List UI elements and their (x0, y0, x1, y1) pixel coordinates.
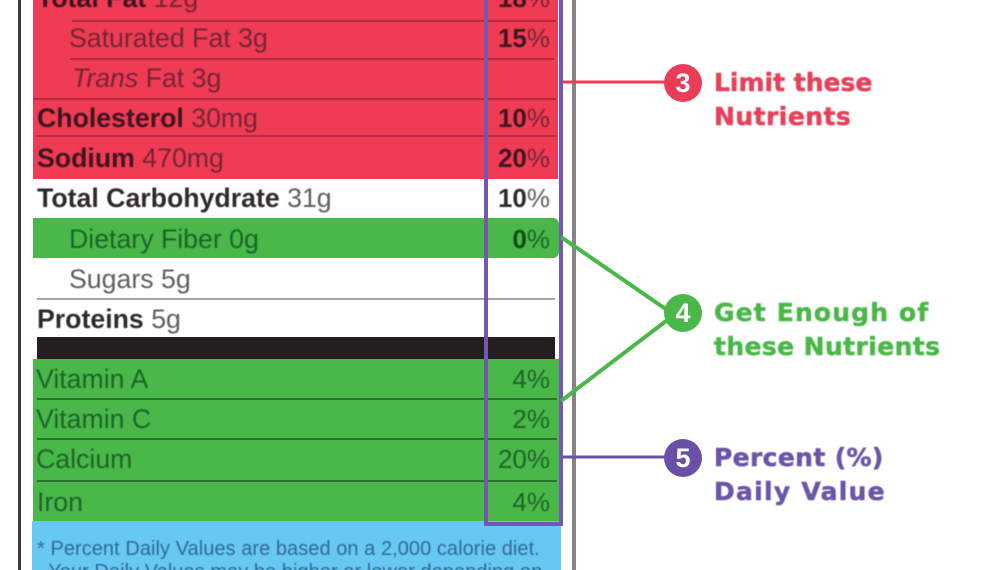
percent daily value column outline (484, 0, 563, 526)
row: sodium: Sodium 470mg (37, 143, 224, 173)
panel: fiber green row (33, 218, 559, 258)
panel: red limit nutrients block (33, 0, 558, 179)
row: saturated fat: Saturated Fat 3g (69, 23, 268, 53)
row: trans fat: Trans Fat 3g (72, 63, 221, 93)
value: cholesterol percent: 10% (498, 103, 550, 133)
row: calcium: Calcium (36, 444, 132, 474)
heading: limit these nutrients (714, 68, 872, 131)
value: carbohydrate percent: 10% (498, 183, 550, 213)
heading: percent daily value (714, 443, 886, 506)
heading: percent daily value: Percent (%) (714, 443, 884, 472)
row: iron: Iron (37, 487, 83, 517)
value: sodium percent: 20% (498, 143, 550, 173)
heading: limit these nutrients: Limit these (714, 68, 872, 97)
badge 5 (664, 439, 702, 477)
badge 5: 5 (675, 443, 691, 473)
badge 4 (664, 294, 702, 332)
panel: footnote blue block (32, 521, 561, 570)
footnote text (37, 538, 542, 570)
row: proteins: Proteins 5g (37, 304, 181, 334)
heading: get enough of these nutrients: Get Enough of (714, 298, 929, 327)
row: total carbohydrate: Total Carbohydrate 31g (37, 183, 332, 213)
row: dietary fiber: Dietary Fiber 0g (69, 224, 259, 254)
badge 4: 4 (675, 298, 691, 328)
value: vitamin A percent: 4% (512, 364, 550, 394)
footnote text: * Percent Daily Values are based on a 2,000 calorie diet. (37, 538, 540, 560)
badge 3: 3 (675, 68, 691, 98)
row: cholesterol: Cholesterol 30mg (37, 103, 258, 133)
heading: get enough of these nutrients (713, 298, 940, 361)
row: vitamin C: Vitamin C (36, 404, 151, 434)
value: vitamin C percent: 2% (512, 404, 550, 434)
divider (72, 20, 556, 22)
value: fiber percent: 0% (512, 224, 550, 254)
black divider bar (37, 337, 555, 359)
value: saturated fat percent: 15% (498, 23, 550, 53)
heading: limit these nutrients: Nutrients (714, 102, 851, 131)
heading: get enough of these nutrients: these Nutrients (714, 332, 940, 361)
panel: nutrition label frame (18, 0, 576, 570)
badge 3 (664, 64, 702, 102)
row: sugars: Sugars 5g (69, 264, 191, 294)
heading: percent daily value: Daily Value (714, 477, 886, 506)
value: calcium percent: 20% (498, 444, 550, 474)
row: vitamin A: Vitamin A (36, 364, 148, 394)
value: iron percent: 4% (512, 487, 550, 517)
panel: vitamins green block (33, 359, 559, 521)
